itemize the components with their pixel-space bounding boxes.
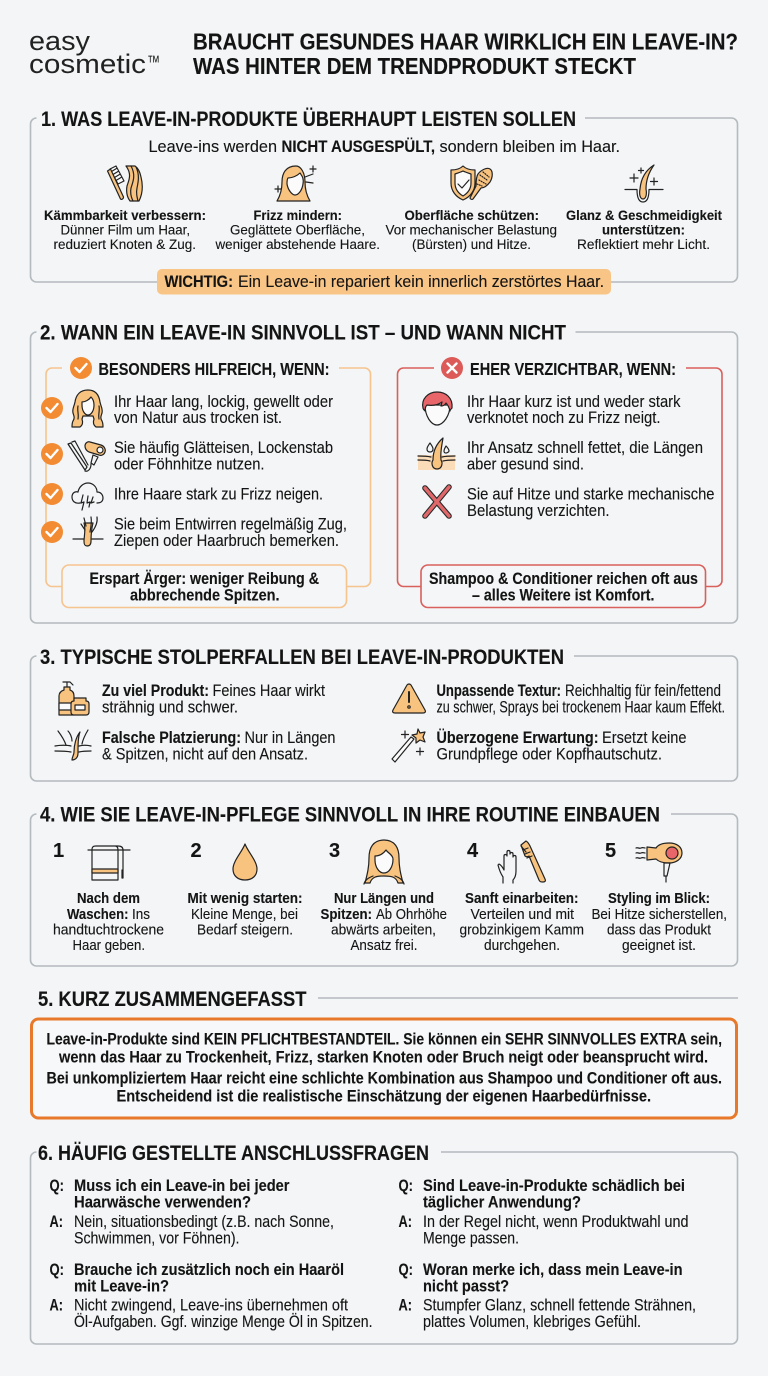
- faq: not suitable: [398, 1260, 696, 1331]
- list: helpful reasons: Ihre Haare stark zu Frizz neigen.: [114, 484, 323, 504]
- step 1: 1: [53, 840, 64, 862]
- list: dispensable reasons: Ihr Ansatz schnell fettet, die Längen: [467, 438, 703, 457]
- list: helpful reasons: Ziepen oder Haarbruch bemerken.: [114, 531, 339, 550]
- list: helpful reasons: oder Föhnhitze nutzen.: [114, 454, 264, 474]
- step 3: Ab Ohrhöhe: [376, 906, 447, 923]
- step 5: Styling im Blick:: [608, 890, 710, 907]
- benefit: surface protection: Vor mechanischer Belastung: [386, 222, 557, 238]
- faq: every wash: Q:: [50, 1176, 64, 1195]
- pitfall: wrong placement: Falsche Platzierung:: [102, 728, 241, 747]
- benefit: combability: reduziert Knoten & Zug.: [54, 237, 196, 253]
- icon: pulled hair: [73, 517, 103, 546]
- benefit: combability: [44, 208, 206, 253]
- step 1: handtuchtrockene: [53, 922, 164, 938]
- heading: section 3: 3. TYPISCHE STOLPERFALLEN BEI LEAVE-IN-PRODUKTEN: [40, 646, 564, 669]
- icon: greasy root: [418, 438, 455, 470]
- step 3: Ansatz frei.: [350, 937, 418, 954]
- icon: towel: [88, 846, 130, 880]
- icon: crossed tools: [425, 487, 449, 516]
- step 1: Waschen:: [67, 906, 128, 923]
- heading: section 2: 2. WANN EIN LEAVE-IN SINNVOLL IST – UND WANN NICHT: [40, 322, 566, 344]
- summary box: wenn das Haar zu Trockenheit, Frizz, starken Knoten oder Bruch neigt oder beansprucht wird.: [58, 1048, 708, 1066]
- faq: harmful daily: In der Regel nicht, wenn Produktwahl und: [423, 1212, 688, 1231]
- title: [193, 28, 738, 79]
- panel: section 2 when useful: [30, 322, 738, 623]
- benefit: frizz: Frizz mindern:: [254, 208, 342, 224]
- icon: iron and dryer: [68, 441, 105, 471]
- callout: saves trouble: [62, 565, 346, 608]
- step 3: [320, 840, 447, 954]
- step 1: [53, 840, 164, 954]
- faq: every wash: Haarwäsche verwenden?: [74, 1192, 251, 1212]
- step 2: 2: [190, 840, 202, 862]
- benefit: combability: Kämmbarkeit verbessern:: [44, 208, 206, 224]
- faq: hair oil: Öl-Aufgaben. Ggf. winzige Menge Öl in Spitzen.: [74, 1312, 372, 1331]
- panel: section 4 routine: [30, 804, 738, 966]
- benefit: frizz: [215, 208, 380, 253]
- pitfall: wrong texture: Unpassende Textur:: [436, 681, 561, 700]
- faq: hair oil: Q:: [50, 1260, 64, 1279]
- step 5: geeignet ist.: [622, 937, 696, 954]
- faq: not suitable: plattes Volumen, klebriges Gefühl.: [423, 1312, 641, 1331]
- faq: every wash: Schwimmen, vor Föhnen).: [74, 1228, 240, 1248]
- faq: not suitable: nicht passt?: [423, 1276, 509, 1296]
- step 5: [592, 840, 727, 954]
- panel: helpful: [41, 357, 370, 608]
- faq: every wash: Muss ich ein Leave-in bei jeder: [74, 1176, 290, 1195]
- benefit: shine: Glanz & Geschmeidigkeit: [566, 208, 722, 224]
- faq: not suitable: A:: [398, 1296, 412, 1314]
- icon: check badge: [70, 357, 92, 379]
- benefit: frizz: Geglättete Oberfläche,: [230, 222, 365, 238]
- pitfall: too much product: [102, 681, 325, 716]
- callout: saves trouble: Erspart Ärger: weniger Reibung &: [90, 569, 319, 588]
- icon: long wavy hair: [72, 390, 103, 427]
- icon: drop: [233, 844, 257, 880]
- step 5: Bei Hitze sicherstellen,: [592, 906, 727, 923]
- check marks: [41, 397, 63, 543]
- pitfall: wrong texture: Reichhaltig für fein/fettend: [565, 681, 721, 700]
- faq: harmful daily: Sind Leave-in-Produkte schädlich bei: [423, 1176, 685, 1195]
- icon: frizz cloud: [72, 483, 103, 510]
- step 4: 4: [467, 840, 479, 862]
- callout: saves trouble: abbrechende Spitzen.: [130, 586, 280, 604]
- step 4: Verteilen und mit: [470, 906, 575, 923]
- step 3: 3: [329, 840, 340, 862]
- summary box: [32, 1019, 736, 1118]
- list: helpful reasons: [114, 392, 347, 550]
- benefit: combability: Dünner Film um Haar,: [60, 222, 190, 238]
- list: helpful reasons: Sie beim Entwirren regelmäßig Zug,: [114, 514, 347, 534]
- icon: warning triangle: [393, 684, 425, 713]
- logo: [29, 26, 160, 79]
- faq: hair oil: Brauche ich zusätzlich noch ein Haaröl: [74, 1260, 344, 1279]
- heading: section 6: 6. HÄUFIG GESTELLTE ANSCHLUSSFRAGEN: [38, 1142, 429, 1165]
- callout: shampoo enough: – alles Weitere ist Komfort.: [472, 586, 654, 604]
- icon: cross badge: [441, 357, 463, 379]
- intro sentence: sondern bleiben im Haar.: [440, 137, 620, 156]
- pitfall: wrong placement: & Spitzen, nicht auf den Ansatz.: [102, 744, 308, 764]
- icon: hair dryer: [636, 843, 682, 882]
- intro sentence: NICHT AUSGESPÜLT,: [282, 137, 435, 156]
- faq: every wash: Nein, situationsbedingt (z.B. nach Sonne,: [74, 1212, 334, 1231]
- logo: ™: [147, 52, 160, 72]
- icon: bottles: [59, 682, 89, 715]
- faq: not suitable: Q:: [398, 1260, 413, 1279]
- step 5: dass das Produkt: [607, 922, 712, 938]
- summary box: Entscheidend ist die realistische Einschätzung der eigenen Haarbedürfnisse.: [116, 1088, 651, 1106]
- faq: harmful daily: Q:: [398, 1176, 413, 1195]
- benefit: shine: [566, 208, 722, 253]
- heading: section 1: 1. WAS LEAVE-IN-PRODUKTE ÜBERHAUPT LEISTEN SOLLEN: [41, 108, 576, 131]
- list: helpful reasons: Ihr Haar lang, lockig, gewellt oder: [114, 392, 333, 411]
- icon: comb and hair: [108, 166, 142, 201]
- step 4: grobzinkigem Kamm: [460, 922, 584, 938]
- panel: section 1 what leave-ins do: [30, 108, 738, 294]
- pitfall: exaggerated expectation: Ersetzt keine: [602, 728, 686, 747]
- list: dispensable reasons: [467, 392, 714, 520]
- step 2: Mit wenig starten:: [188, 890, 302, 907]
- pitfall: exaggerated expectation: Überzogene Erwartung:: [436, 728, 598, 747]
- benefit: surface protection: [386, 208, 557, 253]
- title: WAS HINTER DEM TRENDPRODUKT STECKT: [193, 53, 636, 79]
- faq: harmful daily: [398, 1176, 688, 1248]
- pitfall: wrong placement: [102, 728, 336, 764]
- icon: frizz hair: [275, 166, 316, 201]
- list: helpful reasons: von Natur aus trocken ist.: [114, 408, 282, 427]
- panel: dispensable: [398, 357, 722, 608]
- pitfall: wrong texture: [436, 681, 725, 716]
- faq: not suitable: Woran merke ich, dass mein Leave-in: [423, 1260, 682, 1279]
- step 4: [460, 840, 584, 954]
- icon: hand and comb: [498, 841, 545, 883]
- faq: harmful daily: täglicher Anwendung?: [423, 1192, 581, 1212]
- intro sentence: [148, 137, 620, 156]
- step 2: [188, 840, 302, 938]
- callout: important: [157, 269, 611, 294]
- icon: short hair head: [423, 392, 452, 425]
- benefit: shine: Reflektiert mehr Licht.: [577, 237, 710, 253]
- list: dispensable reasons: Ihr Haar kurz ist und weder stark: [467, 392, 681, 411]
- benefit: surface protection: Oberfläche schützen:: [404, 208, 539, 224]
- faq: harmful daily: A:: [398, 1212, 412, 1231]
- faq: every wash: [50, 1176, 334, 1248]
- faq: every wash: A:: [50, 1212, 63, 1231]
- icon: magic wand: [392, 729, 425, 762]
- icon: hair lengths: [364, 840, 404, 884]
- step 5: 5: [605, 840, 616, 862]
- list: dispensable reasons: Belastung verzichten.: [467, 501, 610, 520]
- step 2: Kleine Menge, bei: [191, 906, 298, 923]
- list: dispensable reasons: aber gesund sind.: [467, 454, 584, 474]
- logo: cosmetic: [29, 49, 146, 79]
- step 4: durchgehen.: [484, 937, 560, 954]
- faq: harmful daily: Menge passen.: [423, 1228, 519, 1248]
- callout: shampoo enough: Shampoo & Conditioner reichen oft aus: [429, 569, 698, 588]
- section 5 summary: [32, 988, 738, 1118]
- callout: important: Ein Leave-in repariert kein innerlich zerstörtes Haar.: [238, 273, 604, 291]
- faq: hair oil: mit Leave-in?: [74, 1276, 169, 1296]
- list: helpful reasons: Sie häufig Glätteisen, Lockenstab: [114, 438, 333, 457]
- step 2: Bedarf steigern.: [197, 922, 293, 938]
- icon: wrong placement: [55, 730, 91, 760]
- intro sentence: Leave-ins werden: [148, 137, 277, 156]
- step 1: Nach dem: [77, 890, 140, 907]
- pitfall: exaggerated expectation: Grundpflege oder Kopfhautschutz.: [436, 744, 662, 764]
- pitfall: too much product: Zu viel Produkt:: [102, 681, 209, 700]
- pitfall: exaggerated expectation: [436, 728, 686, 764]
- faq: hair oil: A:: [50, 1296, 63, 1314]
- faq: hair oil: [50, 1260, 372, 1331]
- panel: section 6 faq: [30, 1142, 738, 1344]
- faq: hair oil: Nicht zwingend, Leave-ins übernehmen oft: [74, 1296, 348, 1314]
- list: dispensable reasons: verknotet noch zu Frizz neigt.: [467, 408, 660, 427]
- panel: section 3 pitfalls: [30, 646, 738, 781]
- pitfall: too much product: strähnig und schwer.: [102, 698, 238, 716]
- faq: not suitable: Stumpfer Glanz, schnell fettende Strähnen,: [423, 1296, 696, 1314]
- icon: shield and brush: [451, 166, 492, 200]
- logo: easy: [29, 26, 91, 56]
- step 3: abwärts arbeiten,: [331, 922, 436, 938]
- subheading: dispensable: EHER VERZICHTBAR, WENN:: [470, 359, 676, 379]
- benefit: surface protection: (Bürsten) und Hitze.: [412, 237, 531, 253]
- subheading: helpful: BESONDERS HILFREICH, WENN:: [98, 359, 330, 379]
- benefit: frizz: weniger abstehende Haare.: [215, 237, 380, 253]
- list: dispensable reasons: Sie auf Hitze und starke mechanische: [467, 484, 714, 504]
- step 3: Spitzen:: [320, 906, 372, 923]
- heading: section 5: 5. KURZ ZUSAMMENGEFASST: [38, 988, 307, 1011]
- step 1: Ins: [132, 906, 150, 923]
- pitfall: wrong placement: Nur in Längen: [244, 728, 336, 747]
- step 4: Sanft einarbeiten:: [465, 890, 578, 907]
- step 1: Haar geben.: [72, 937, 145, 954]
- callout: important: WICHTIG:: [164, 273, 233, 291]
- pitfall: too much product: Feines Haar wirkt: [212, 681, 325, 700]
- benefit: shine: unterstützen:: [602, 222, 685, 238]
- step 3: Nur Längen und: [334, 890, 434, 907]
- callout: shampoo enough: [421, 565, 706, 608]
- heading: section 4: 4. WIE SIE LEAVE-IN-PFLEGE SINNVOLL IN IHRE ROUTINE EINBAUEN: [40, 804, 660, 826]
- icon: shiny hair: [625, 165, 663, 202]
